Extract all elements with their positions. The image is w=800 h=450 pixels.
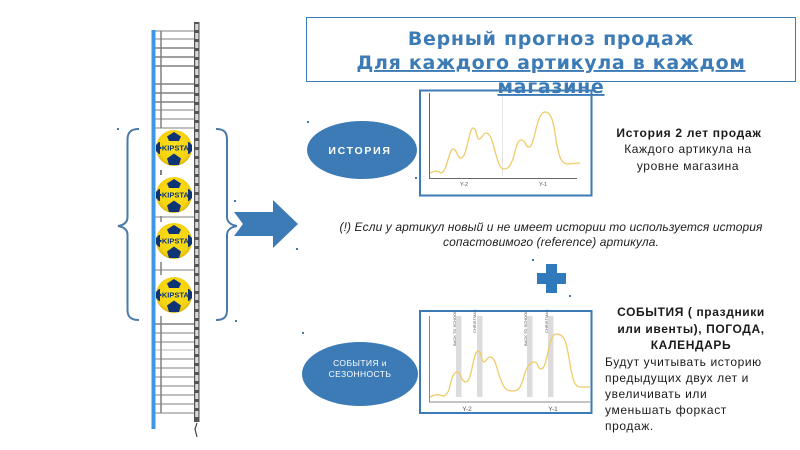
chart: events and seasonality: Y-1 [548,406,558,413]
arrow [234,200,298,248]
events description: СОБЫТИЯ ( праздники [617,305,765,319]
rack inner post [160,31,162,413]
chart: sales history [420,90,592,196]
icon: plus [537,264,566,293]
history ellipse: ИСТОРИЯ [328,145,392,157]
icon: football 4: •KIPSTA [159,290,189,300]
left brace [118,129,139,320]
chart: events and seasonality: BACK TO SCHOOL [452,310,457,346]
history description [616,126,762,173]
title: магазине [497,76,605,98]
icon: football 2 [156,177,192,213]
icon: football 3 [156,223,192,259]
rack dark upright [194,22,200,422]
history description: уровне магазина [637,159,739,173]
events ellipse: СЕЗОННОСТЬ [329,369,391,379]
title: Для каждого артикула в каждом [356,52,746,74]
rack blue upright [152,30,156,429]
events description: продаж. [605,419,654,433]
icon: football 4 [156,277,192,313]
rack upright perforations [195,24,198,420]
chart: events and seasonality: CHRISTMAS [544,309,549,333]
chart: events and seasonality: BACK TO SCHOOL [523,310,528,346]
icon: football 1 [156,130,192,166]
title: Верный прогноз продаж [408,28,694,50]
scattered selection dots [117,121,571,334]
icon: football 2: •KIPSTA [159,190,189,200]
icon: football 1: •KIPSTA [159,144,189,152]
note on new articles: (!) Если у артикул новый и не имеет истории то используется история [339,220,763,234]
events ellipse [302,342,418,406]
events description: Будут учитывать историю [605,355,762,369]
chart: sales history: Y-2 [460,182,468,188]
note on new articles: сопастовимого (reference) артикула. [443,235,659,249]
events description: или ивенты), ПОГОДА, [617,322,765,336]
right brace [216,129,237,320]
history description: История 2 лет продаж [616,126,762,140]
chart: events and seasonality [420,309,592,413]
events description: уменьшать форкаст [605,403,727,417]
chart: sales history: Y-1 [539,182,547,188]
events description [605,305,765,433]
title box [306,18,796,82]
events description: увеличивать или [605,387,707,401]
history ellipse [307,121,417,179]
chart: events and seasonality: Y-2 [462,406,472,413]
events ellipse: СОБЫТИЯ и [333,358,387,368]
events description: предыдущих двух лет и [605,371,749,385]
history description: Каждого артикула на [624,142,752,156]
rack shelves [155,31,194,413]
note on new articles [339,220,763,249]
chart: events and seasonality: CHRISTMAS [472,309,477,333]
shelving rack [152,22,200,437]
events description: КАЛЕНДАРЬ [651,338,731,352]
icon: football 3: •KIPSTA [159,236,189,246]
rack foot [195,423,197,437]
title [356,28,746,98]
